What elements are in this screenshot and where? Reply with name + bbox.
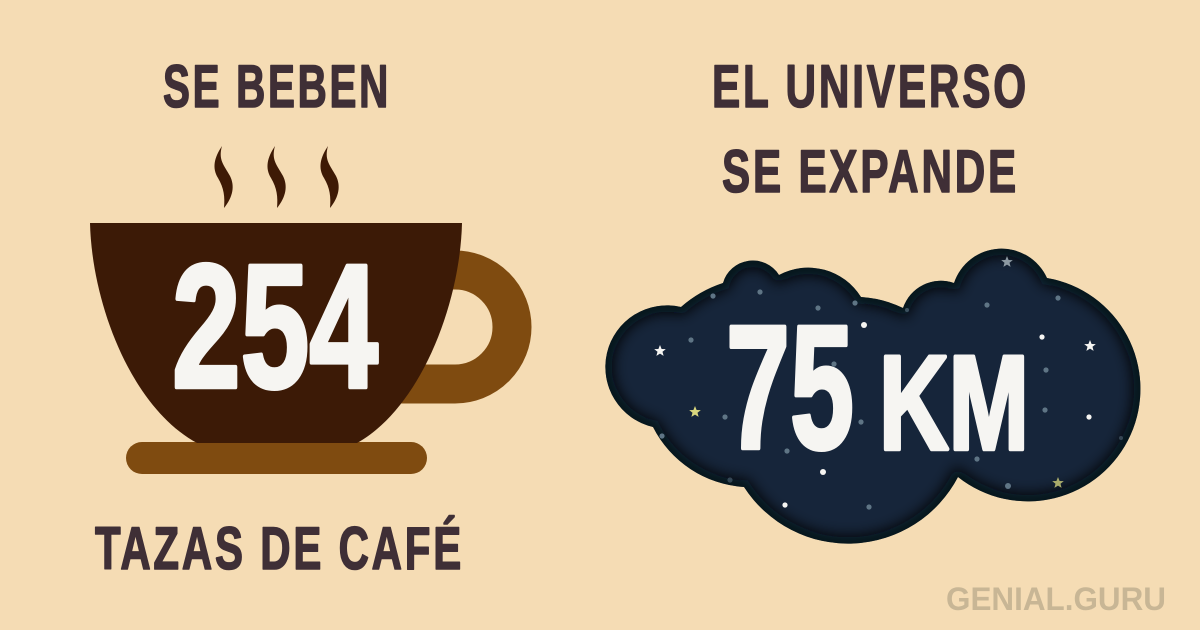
heading: el universo se expande [712,53,1029,205]
stars: bright dots [782,322,1092,508]
icon: cup body [90,223,462,443]
infographic canvas [90,64,1164,610]
number: 254: 254 [172,229,378,425]
caption: tazas de café: TAZAS DE CAFÉ [95,515,464,582]
panel: starry space cloud [605,249,1140,544]
icon: cup handle [400,270,512,384]
icon: saucer [126,442,427,474]
heading: el universo se expande: EL UNIVERSO [712,53,1029,120]
stars: five-pointed [654,256,1096,488]
cloud shape [605,249,1140,544]
icon: coffee cup with steam [90,146,512,474]
heading: se beben: SE BEBEN [163,53,391,120]
icon: steam [215,146,339,208]
watermark: GENIAL.GURU [946,581,1166,617]
heading: el universo se expande: SE EXPANDE [722,138,1019,205]
number: 75: 75 [726,290,854,486]
stars: dim dots [659,289,1123,510]
unit: km: KM [879,329,1029,478]
